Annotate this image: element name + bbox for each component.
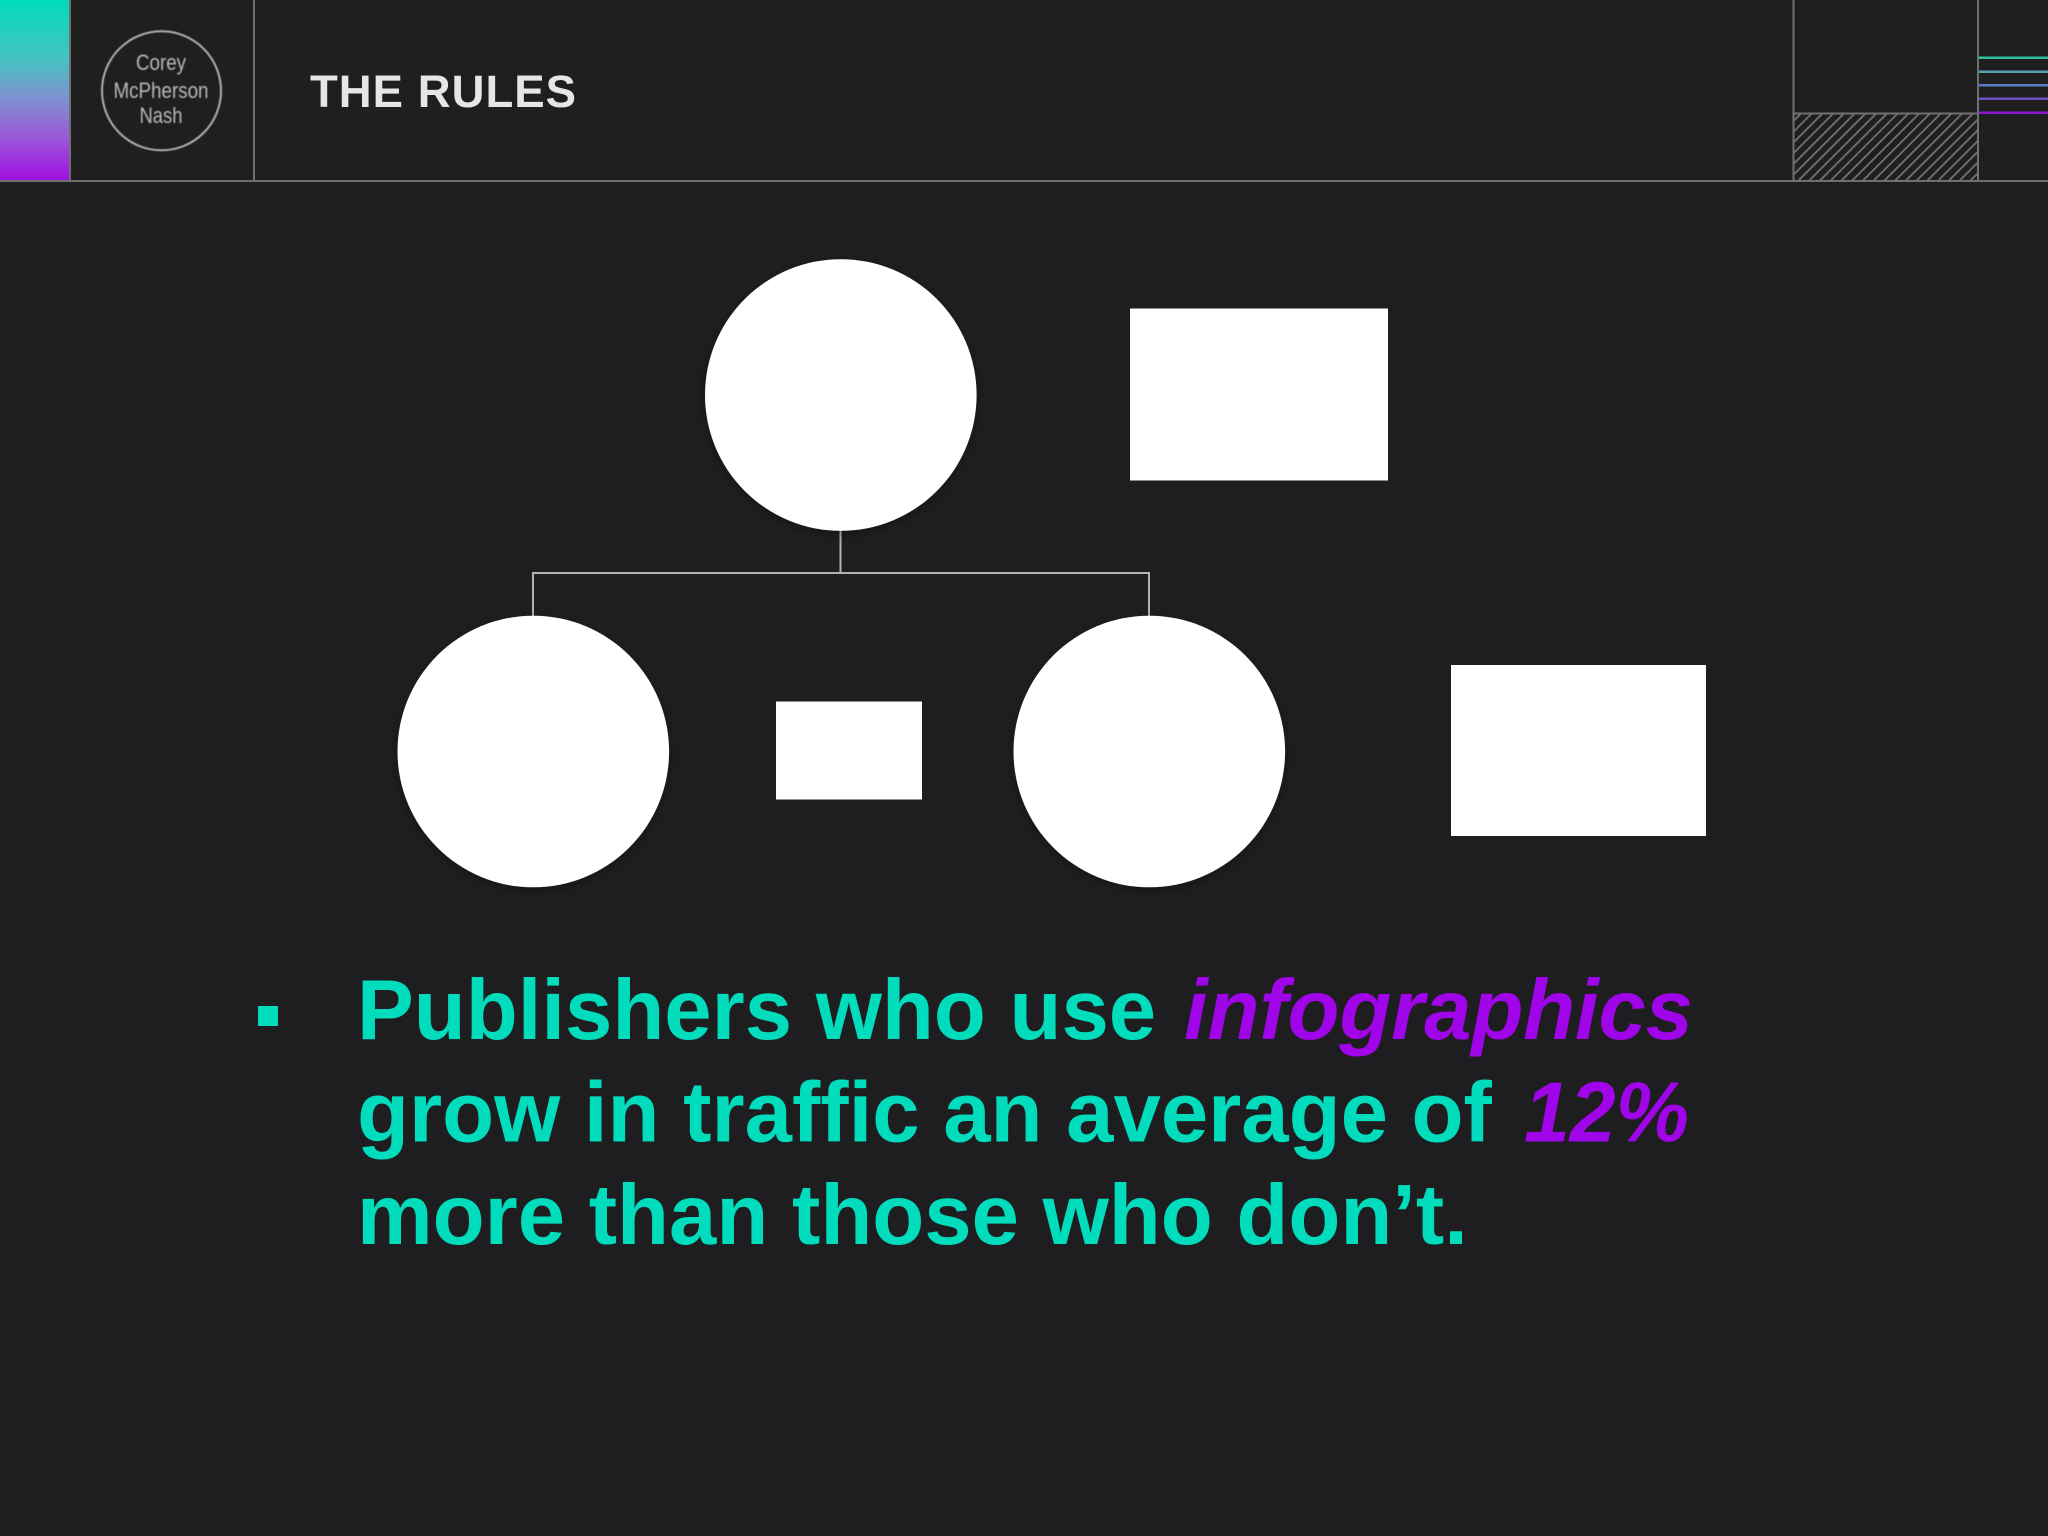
statement text: Publishers who use (357, 963, 1156, 1058)
header bar (0, 0, 2048, 182)
top circle (705, 259, 977, 531)
header decoration: hatched box (1792, 0, 1979, 180)
title: THE RULES (310, 66, 576, 117)
right rectangle (1451, 665, 1706, 836)
statement text: more than those who don’t. (357, 1168, 1468, 1263)
logo: Corey McPherson Nash: McPherson (114, 78, 208, 103)
statement text: grow in traffic an average of (357, 1066, 1493, 1160)
statement text: 12% (1524, 1066, 1689, 1160)
statement text: infographics (1184, 963, 1693, 1058)
gradient block (0, 0, 69, 180)
left circle (398, 616, 669, 887)
top right rectangle (1130, 308, 1388, 480)
connector lines (533, 530, 1149, 616)
statement text (357, 963, 1693, 1263)
logo: Corey McPherson Nash (102, 31, 221, 150)
logo: Corey McPherson Nash: Corey (136, 50, 186, 75)
header decoration: colored lines (1979, 56, 2048, 114)
logo: Corey McPherson Nash: Nash (140, 103, 182, 128)
small middle rectangle (776, 702, 922, 800)
bullet marker (258, 1006, 278, 1026)
right circle (1014, 616, 1285, 887)
